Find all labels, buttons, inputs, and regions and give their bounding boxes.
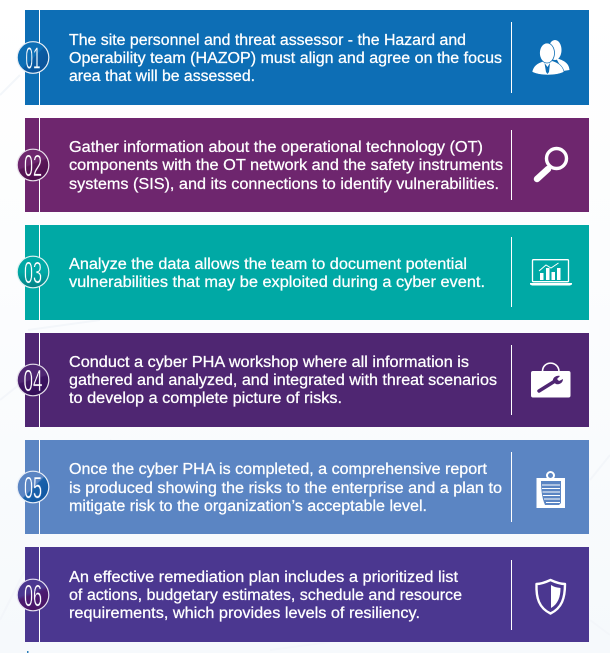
number badge 01 bbox=[17, 40, 49, 76]
text: step 05 bbox=[69, 461, 502, 515]
panel: step 06 bbox=[17, 547, 589, 642]
number badge 05 bbox=[17, 470, 49, 505]
text: step 03: vulnerabilities that may be exploited during a cyber event. bbox=[69, 274, 485, 291]
panel: step 04 bbox=[17, 333, 589, 427]
number badge 05: 05 bbox=[24, 470, 42, 505]
panel: step 05 bbox=[17, 440, 589, 534]
text: step 06: requirements, which provides levels of resiliency. bbox=[69, 605, 420, 622]
text: step 04: Conduct a cyber PHA workshop where all information is bbox=[69, 354, 469, 371]
panel: step 02 bbox=[17, 118, 589, 212]
text: step 03: Analyze the data allows the team to document potential bbox=[69, 256, 467, 273]
panel: step 03 bbox=[17, 225, 589, 320]
text: step 04: to develop a complete picture of risks. bbox=[69, 390, 342, 407]
panel: step 01 bbox=[17, 10, 589, 105]
number badge 03: 03 bbox=[24, 255, 42, 290]
text: step 01: area that will be assessed. bbox=[69, 68, 255, 85]
text: step 05: mitigate risk to the organization’s acceptable level. bbox=[69, 498, 427, 515]
text: step 05: is produced showing the risks to the enterprise and a plan to bbox=[69, 480, 502, 497]
icon: toolbox with wrench bbox=[531, 363, 570, 398]
icon: clipboard bbox=[536, 472, 565, 508]
text: step 01: Operability team (HAZOP) must align and agree on the focus bbox=[69, 50, 502, 67]
text: step 06: An effective remediation plan includes a prioritized list bbox=[69, 569, 459, 586]
text: step 01 bbox=[69, 32, 502, 85]
text: step 03 bbox=[69, 256, 485, 291]
number badge 02: 02 bbox=[24, 148, 42, 183]
text: step 02: systems (SIS), and its connections to identify vulnerabilities. bbox=[69, 176, 499, 193]
number badge 01: 01 bbox=[26, 40, 40, 76]
text: step 02: Gather information about the operational technology (OT) bbox=[69, 139, 483, 156]
number badge 04 bbox=[17, 363, 49, 398]
text: step 04: gathered and analyzed, and integrated with threat scenarios bbox=[69, 372, 497, 389]
number badge 06: 06 bbox=[24, 578, 42, 613]
number badge 03 bbox=[17, 255, 49, 290]
icon: people bbox=[532, 40, 570, 75]
number badge 02 bbox=[17, 148, 49, 183]
text: step 06: of actions, budgetary estimates, schedule and resource bbox=[69, 587, 462, 604]
icon: shield bbox=[536, 580, 565, 614]
text: step 02 bbox=[69, 139, 503, 193]
number badge 06 bbox=[17, 578, 49, 613]
number badge 04: 04 bbox=[24, 363, 42, 398]
text: step 01: The site personnel and threat assessor - the Hazard and bbox=[69, 32, 466, 49]
text: step 02: components with the OT network and the safety instruments bbox=[69, 157, 503, 174]
icon: magnifier bbox=[537, 148, 566, 179]
text: step 06 bbox=[69, 569, 462, 622]
text: step 05: Once the cyber PHA is completed, a comprehensive report bbox=[69, 461, 488, 478]
icon: laptop chart bbox=[530, 260, 572, 286]
text: step 04 bbox=[69, 354, 497, 407]
